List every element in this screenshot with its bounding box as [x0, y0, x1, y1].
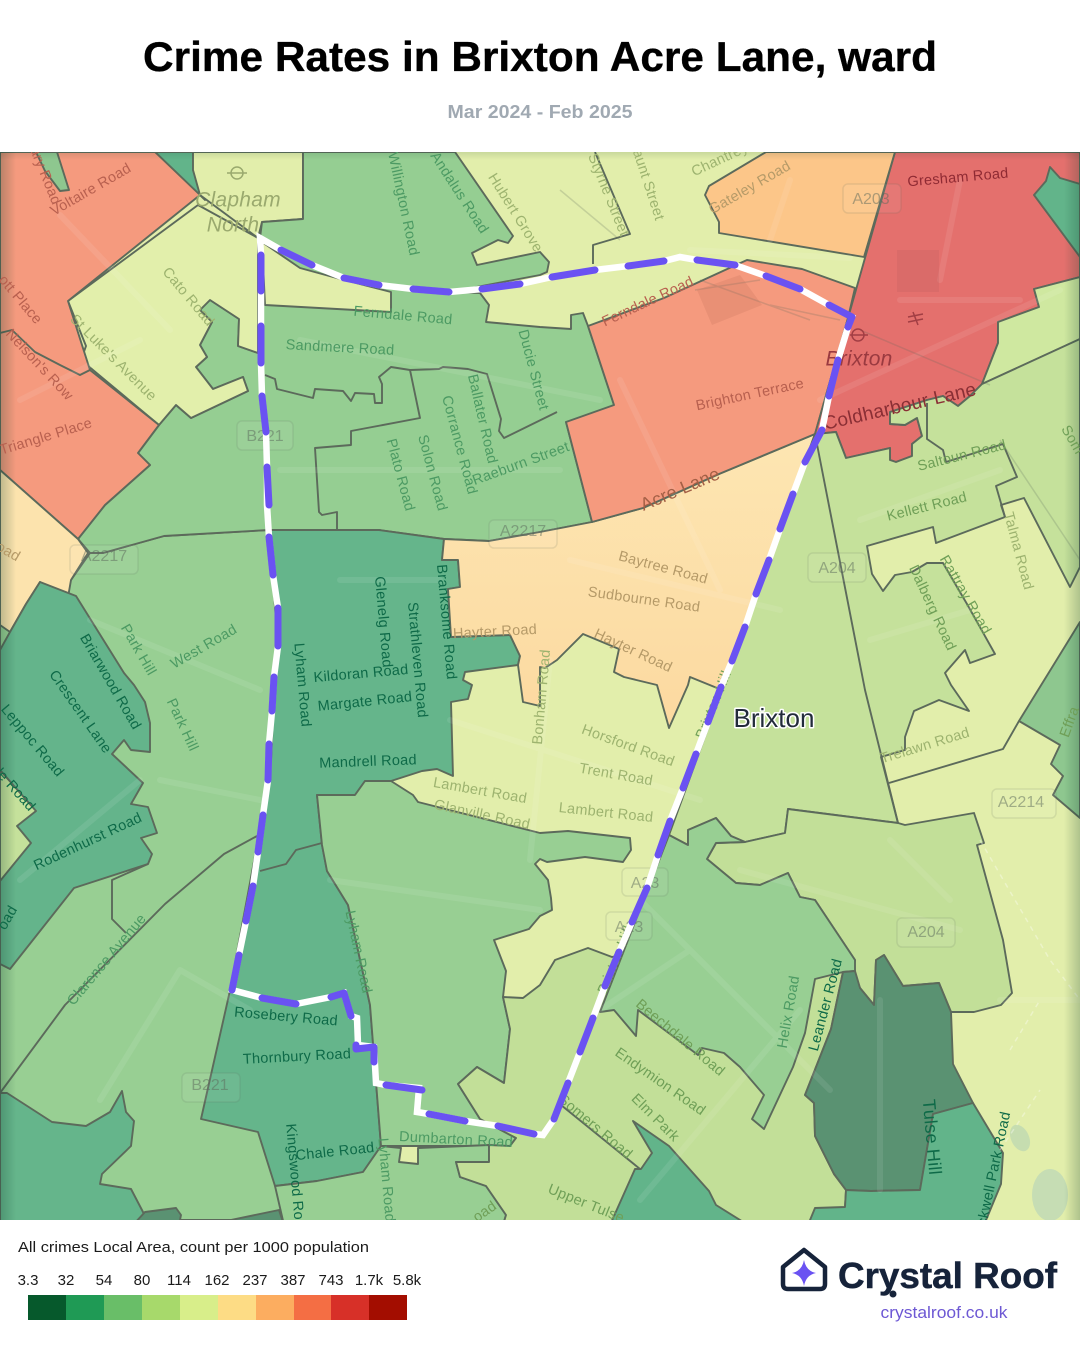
- legend values: 5.8k: [393, 1272, 422, 1289]
- road labels on salmon and red areas: Acre Lane: [637, 463, 723, 515]
- legend values: 387: [280, 1272, 306, 1289]
- road number badges: A2217: [81, 548, 127, 565]
- road labels on pale lime areas: [67, 140, 1036, 833]
- logo: Crystal Roof: [780, 1248, 1058, 1322]
- title: Crime Rates in Brixton Acre Lane, ward: [143, 33, 937, 80]
- legend title: All crimes Local Area, count per 1000 population: [18, 1239, 369, 1256]
- road labels on mid green areas: Solon Road: [414, 433, 450, 513]
- legend values: 162: [204, 1272, 230, 1289]
- road labels on mid green areas: Helix Road: [775, 974, 803, 1050]
- road labels on pale lime areas: St Luke's Avenue: [67, 312, 159, 404]
- road labels on light green areas: Elm Park: [628, 1091, 683, 1146]
- road labels on mid green areas: Ducie Street: [515, 328, 551, 412]
- road labels on darker green areas: Strathleven Road: [404, 602, 430, 718]
- road labels on salmon and red areas: Ferndale Road: [600, 274, 696, 330]
- road labels on mid green areas: Raeburn Street: [470, 439, 572, 489]
- road labels on darker green areas: Glenelg Road: [371, 576, 395, 668]
- road labels on pale lime areas: Horsford Road: [579, 722, 677, 770]
- legend: [18, 1239, 422, 1320]
- road labels on pale lime areas: Bonham Road: [530, 649, 554, 745]
- crime-rate regions: [0, 152, 1080, 1225]
- road labels on darker green areas: Leander Road: [806, 957, 846, 1053]
- road labels on mid green areas: Corrance Road: [438, 394, 480, 496]
- road labels on pale lime areas: North: [207, 214, 259, 236]
- legend values: [18, 1272, 422, 1289]
- icon: tube station Clapham North: [227, 167, 247, 179]
- road labels on darker green areas: Margate Road: [317, 689, 413, 715]
- road labels on mid green areas: Park Hill: [117, 622, 159, 678]
- road labels on salmon and red areas: Brighton Terrace: [694, 376, 806, 414]
- road labels on pale lime areas: Lambert Road: [432, 775, 528, 807]
- road number badges: A203: [852, 191, 890, 208]
- road number badges: B221: [246, 428, 284, 445]
- road number badges: A2214: [998, 794, 1044, 811]
- legend values: 80: [134, 1272, 150, 1289]
- road labels on salmon and red areas: Voltaire Road: [48, 160, 134, 220]
- website url: crystalroof.co.uk: [880, 1304, 1008, 1322]
- legend values: 237: [242, 1272, 268, 1289]
- street network: [20, 180, 1080, 1221]
- road labels on darker green areas: Chale Road: [295, 1140, 375, 1164]
- road labels on pale lime areas: Cato Road: [159, 264, 217, 330]
- road labels on darker green areas: Lyham Road: [290, 642, 314, 728]
- road labels on pale lime areas: Talma Road: [1000, 510, 1036, 592]
- wordmark: Crystal Roof: [838, 1255, 1058, 1296]
- road number badges: A204: [818, 560, 856, 577]
- choropleth map: [0, 152, 1080, 1220]
- road labels on darker green areas: Briarwood Road: [76, 631, 144, 733]
- road labels on pale lime areas: Clapham: [195, 188, 281, 212]
- road labels on salmon and red areas: Brixton: [825, 348, 893, 370]
- vignette edges: [0, 152, 1080, 1220]
- road labels on darker green areas: Crescent Lane: [45, 667, 115, 757]
- legend values: 1.7k: [355, 1272, 384, 1289]
- road labels on mid green areas: Clarence Avenue: [64, 911, 150, 1009]
- road labels on light green areas: Beechdale Road: [632, 996, 728, 1080]
- road labels on pale lime areas: Trent Road: [578, 761, 654, 789]
- road labels on peach areas: Gateley Road: [706, 158, 794, 218]
- road labels on light green areas: Rattray Road: [936, 553, 994, 637]
- legend values: 54: [96, 1272, 112, 1289]
- road labels on salmon and red areas: Gresham Road: [907, 166, 1009, 190]
- legend values: 743: [318, 1272, 344, 1289]
- road labels on mid green areas: Park Hill: [163, 696, 201, 754]
- map base area: [0, 152, 1080, 1220]
- road labels on darker green areas: Tulse Hill: [919, 1098, 945, 1176]
- road labels on mid green areas: Ballater Road: [464, 373, 500, 465]
- legend values: 32: [58, 1272, 74, 1289]
- road labels on mid green areas: [64, 149, 803, 1223]
- road labels on salmon and red areas: Triangle Place: [0, 415, 94, 459]
- road labels on mid green areas: Willington Road: [384, 152, 422, 257]
- road labels on pale lime areas: Styrne Street: [584, 152, 632, 239]
- road labels on mid green areas: West Road: [168, 622, 240, 672]
- road labels on light green areas: Brixton Hill: [595, 923, 637, 997]
- road labels on darker green areas: Thornbury Road: [243, 1046, 351, 1068]
- legend values: 114: [167, 1272, 191, 1289]
- subtitle: date range: Mar 2024 - Feb 2025: [448, 101, 632, 122]
- road labels on salmon and red areas: Coldharbour Lane: [822, 379, 978, 435]
- road labels on darker green areas: Kildoran Road: [313, 662, 409, 686]
- road labels on light green areas: Kellett Road: [885, 489, 969, 525]
- road labels on mid green areas: Lyham Road: [341, 909, 375, 995]
- road number badges: A2217: [500, 523, 546, 540]
- road labels on mid green areas: Ferndale Road: [353, 304, 453, 328]
- icon: house with star: [783, 1250, 825, 1289]
- road labels on darker green areas: Branksome Road: [433, 564, 459, 680]
- road labels on mid green areas: Dumbarton Road: [399, 1129, 513, 1151]
- road labels on peach areas: Hayter Road: [591, 626, 675, 676]
- road labels on light green areas: [470, 423, 1080, 1227]
- road labels on peach areas: Sudbourne Road: [587, 584, 701, 616]
- road labels on light green areas: Saltoun Road: [916, 437, 1008, 475]
- legend values: 3.3: [18, 1272, 38, 1289]
- road labels on peach areas: [0, 158, 794, 676]
- road labels on peach areas: Hayter Road: [453, 622, 537, 642]
- road labels on darker green areas: [0, 564, 1014, 1250]
- road labels on darker green areas: Rodenhurst Road: [31, 810, 145, 874]
- road labels on light green areas: Endymion Road: [612, 1045, 708, 1119]
- road number badges: B221: [191, 1077, 229, 1094]
- ward boundary: [232, 238, 852, 1135]
- road labels on pale lime areas: Hubert Grove: [484, 171, 546, 255]
- road labels on pale lime areas: Trelawn Road: [878, 725, 972, 767]
- road labels on salmon and red areas: Nelson's Row: [2, 326, 76, 404]
- road labels on peach areas: Baytree Road: [617, 548, 709, 588]
- place label: Brixton: Brixton: [734, 703, 814, 733]
- road number badges: A23: [631, 875, 659, 892]
- legend colour scale: [28, 1295, 407, 1320]
- road labels on mid green areas: Plato Road: [383, 437, 417, 513]
- road labels on pale lime areas: Glanville Road: [432, 797, 532, 833]
- road number badges: A204: [907, 924, 945, 941]
- road number badges: [70, 184, 1056, 1102]
- road labels on salmon and red areas: [0, 145, 1009, 515]
- road labels on darker green areas: Mandrell Road: [319, 752, 417, 772]
- road labels on darker green areas: Rosebery Road: [234, 1004, 338, 1030]
- road number badges: A23: [615, 919, 643, 936]
- road labels on light green areas: Somers Road: [555, 1091, 635, 1163]
- icon: tube and rail station Brixton: [850, 312, 923, 341]
- road labels on pale lime areas: Lambert Road: [558, 800, 654, 826]
- logo keyhole detail: [890, 1290, 896, 1298]
- road labels on mid green areas: Sandmere Road: [285, 337, 395, 359]
- road labels on light green areas: Brixton Hill: [693, 668, 735, 742]
- road labels on light green areas: Dalberg Road: [905, 563, 959, 653]
